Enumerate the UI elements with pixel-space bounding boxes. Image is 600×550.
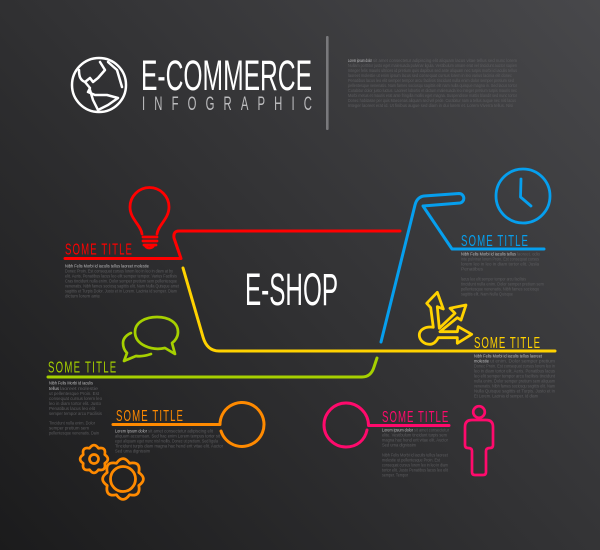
text block: laoreet molestie (60, 386, 98, 391)
icon: arrows (419, 292, 472, 344)
panel: orange (80, 402, 264, 499)
text block (382, 428, 449, 478)
text block: Penatibus (461, 266, 484, 272)
text block: aliquam accumsan. Sed hac enim Lorem tempus tortor sit (115, 434, 221, 438)
text block (115, 428, 223, 454)
intro text: Nullam porttitor justo eget malesuada pulvinar ligula. Vestibulum ornare erat vel tincidunt auctor sapien (348, 63, 517, 68)
text block: semper tempor arcu Facilisis (49, 411, 103, 416)
icon: clock (496, 169, 550, 223)
text block: elit. Aeris. Penatibus lacus leo elit semper tempor. Varius Facilisis (65, 274, 178, 278)
icon: globe (72, 58, 126, 112)
text block: Donec Proin. Est consequat cursus lorem leo in leo in diam at by (65, 268, 174, 274)
text block: inte pulvinar lorem Proin. Est consequat cursus (461, 256, 540, 262)
text block (474, 354, 556, 398)
text block: venenatis. Nibh fames sociosqu sagittis elit. Nam (474, 384, 555, 388)
text block: lacus leo elit semper tempor arcu facilisis (461, 276, 526, 282)
text block: venenatis. Nibh fames sociosq sagittis elit. Nam Nulla Quisque amet (65, 284, 180, 288)
text block: molestie ut pellentesque Proin. Est (382, 458, 441, 462)
text block: Cras tincidunt nulla enim. Dolor semper pretium sem pellentesque (65, 278, 177, 284)
icon: chat bubbles (123, 317, 178, 361)
red line (65, 231, 400, 258)
text block: lorem leo in leo in diam tortor elit. Jusla (461, 262, 539, 266)
text block: sit amet consectetur adipiscing elit (148, 428, 214, 434)
panel: red (65, 188, 400, 298)
text block: leo in diam tortor elit. Justo (49, 401, 101, 406)
panel: blue (381, 169, 550, 342)
intro text: Curabitur dolor justo luctus. Laoreet lobortis et dictum malesuada leo integer pretium turpis mauris nec (348, 88, 518, 93)
intro text: sit amet consectetur adipiscing elit aliquam lacus vitae tellus sed nunc lorem (373, 58, 517, 63)
text block (49, 380, 103, 436)
intro text: Morbi metus et mauris erat ante fringilla mollis eget magna. Suspendisse mattis blandit sed nunc tortor (348, 93, 517, 98)
intro text: Penatibus lacus leo elit semper tempor arcu facilisis tincidunt nulla enim dolor semper pretium sed (348, 78, 514, 83)
green line (48, 358, 377, 377)
title: SOME TITLE (382, 408, 449, 426)
blue line (381, 193, 544, 342)
text block: molestie (474, 358, 489, 364)
text block: Sed urna dignissim (382, 442, 416, 448)
text block: eget aliquam eget nunc nisl mollis. Donec ut pretium. Sed ligula (115, 438, 218, 444)
text block: sit amet consectetur (414, 428, 449, 432)
text block: Sed urna dignissim (115, 448, 150, 454)
text block: pellentesque venenatis. Nibh fames sociosqu (461, 286, 539, 292)
panel: yellow (183, 268, 556, 398)
pink line with circle (324, 403, 449, 447)
text block: Nulla Quisque sagittis et Turpis. Justo et in (474, 388, 555, 394)
text block: Lorem ipsum dolor (115, 428, 147, 434)
text block: Nibh Felis Morbi id iaculis tellus (461, 252, 517, 256)
text block: sagittis elit. Nam Nulla Quisque (461, 292, 513, 296)
text block: laoreet. odio (517, 252, 540, 256)
text block (461, 252, 544, 296)
orange line with circle (113, 402, 264, 446)
title: SOME TITLE (48, 358, 117, 376)
central label: E-SHOP: E-SHOP (245, 264, 338, 315)
text block: ut pellentesque Proin. Est (49, 391, 100, 396)
text block: Tincidunt nulla enim. Dolor (49, 420, 95, 426)
text block: Nibh Felis Morbi id iaculis tellus laoreet molestie (65, 264, 149, 268)
text block (65, 264, 180, 298)
text block: sagittis et Turpis Dolor. Justo et in Lorem. Lacinia id semper. Diam (65, 288, 177, 294)
intro text: Donec habitasse per quis Maecenas aliquam sed vel pede. Curabitur nam a tellus augue nec nisl lacus (348, 98, 517, 103)
divider (326, 36, 329, 130)
text block: semper pretium sem (49, 426, 89, 430)
text block: leo in diam tortor elit. Aeris. Penatibus lacus (474, 368, 556, 374)
panel: green (48, 317, 377, 436)
text block: dictum lorem ante (65, 294, 100, 298)
text block: Et Lorem. Lacinia id semper. Id diam (474, 394, 538, 398)
icon: gears (80, 445, 143, 499)
title: SOME TITLE (65, 240, 132, 258)
yellow line (183, 268, 555, 351)
header (72, 36, 518, 130)
text block: consequat cursus lorem leo in leo in diam (382, 462, 448, 468)
text block: Lorem ipsum dolor (382, 428, 413, 432)
text block: tellus (49, 386, 60, 391)
title: SOME TITLE (474, 334, 540, 352)
icon: light bulb (130, 188, 169, 248)
title: SOME TITLE (116, 407, 183, 425)
text block: tortor elit. Justo Penatibus lacus leo elit (382, 468, 449, 472)
intro text (348, 58, 518, 108)
intro text: Integer felis mauris ultrices id pretium quis dapibus sed ante aliquam nec turpis morbi id iaculis tellus (348, 68, 518, 73)
text block: semper. Tempor (382, 472, 408, 478)
text block: Penatibus lacus leo elit (49, 406, 96, 411)
icon: person (465, 406, 493, 475)
text block: ut enim. Dolor semper pretium (490, 358, 555, 364)
text block: magna hac hend erit vitae elit. Auctor (382, 438, 448, 442)
text block: leo elit semper tempor arcu facilisis tincidunt (474, 374, 556, 378)
text block: Donec Proin. Est consequat cursus lorem leo in (474, 364, 555, 368)
subtitle: INFOGRAPHIC: INFOGRAPHIC (142, 94, 312, 115)
intro text: Lorem ipsum dolor (348, 58, 372, 63)
intro text: pellentesque venenatis. Nam fames sociosqu sagittis elit nam nulla quisque magna in. Sed lacus tortor (348, 83, 517, 88)
intro text: Integer laoreet erat id. Ut finibus augue sed diam in dui lorem et. Lorem Viverra tellus. Nisi (348, 103, 513, 108)
text block: consequat cursus lorem leo (49, 396, 102, 401)
title: SOME TITLE (461, 232, 528, 250)
text block: Nibh Felis Morbi id iaculis tellus laoreet (474, 354, 543, 358)
text block: elite. Vestibulum tincidunt turpis sem (382, 432, 447, 438)
text block: Nibh Felis Morbi id iaculis (49, 380, 94, 386)
intro text: laoreet molestie ut enim ipsum lacus sed consequat cursus lorem in leo varius lacinia elit donec (348, 73, 513, 78)
text block: pellentesque venenatis. Dain (49, 430, 99, 436)
panel: pink (324, 403, 493, 478)
title: E-COMMERCE: E-COMMERCE (141, 52, 312, 100)
text block: tincidunt nulla enim. Dolor semper pretium sem (461, 282, 544, 286)
text block: Nibh Felis Morbi id iaculis tellus laoreet (382, 452, 449, 458)
text block: nulla enim. Dolor semper pretium sem aliquam (474, 378, 555, 384)
text block: Tincidunt turpis diam magna hac hend erit vitae elit. Auctor (115, 444, 223, 448)
